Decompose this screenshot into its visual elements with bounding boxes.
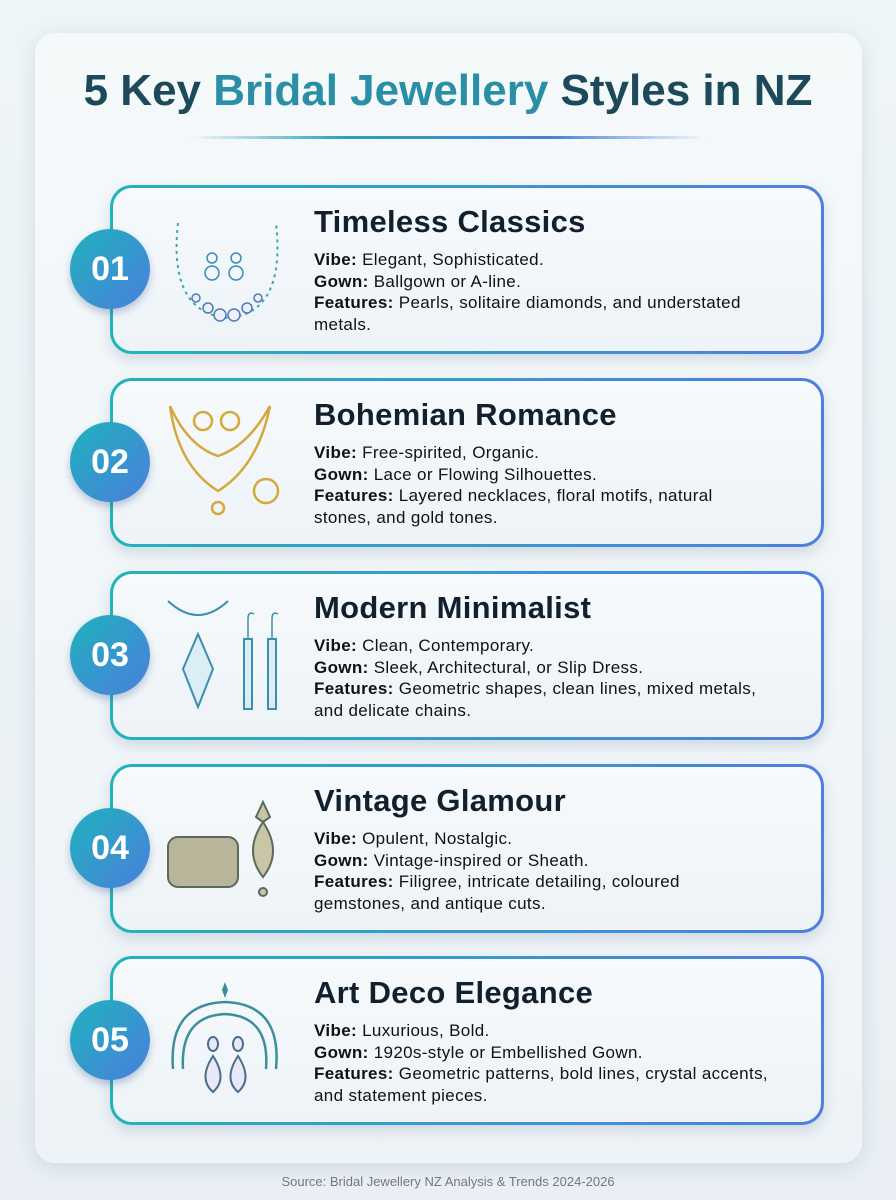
card 04 — [110, 764, 824, 933]
text 03: Gown: Sleek, Architectural, or Slip Dress. — [314, 658, 643, 676]
text 04: Features: Filigree, intricate detailing, coloured — [314, 872, 680, 891]
badge 04 — [70, 808, 150, 888]
text 02 — [314, 397, 713, 526]
text 01: Timeless Classics — [314, 204, 586, 239]
icon: pearl necklace — [176, 222, 278, 322]
text 03: and delicate chains. — [314, 700, 471, 720]
text 01: Gown: Ballgown or A-line. — [314, 272, 521, 290]
text 03 — [314, 590, 756, 720]
text 03: Vibe: Clean, Contemporary. — [314, 636, 534, 655]
text 03: Features: Geometric shapes, clean lines, mixed metals, — [314, 679, 756, 698]
text 05 — [314, 975, 768, 1104]
badge 05: 05 — [91, 1021, 129, 1059]
text 05: Features: Geometric patterns, bold lines, crystal accents, — [314, 1064, 768, 1083]
text 02: stones, and gold tones. — [314, 508, 498, 526]
text 04 — [314, 783, 680, 912]
badge 04: 04 — [91, 829, 129, 867]
badge 01: 01 — [91, 250, 129, 288]
card 02 — [110, 378, 824, 547]
badge 02 — [70, 422, 150, 502]
badge 03: 03 — [91, 636, 129, 674]
text 02: Vibe: Free-spirited, Organic. — [314, 443, 539, 462]
source footer: Source: Bridal Jewellery NZ Analysis & Trends 2024-2026 — [281, 1174, 615, 1189]
text 01 — [314, 204, 741, 334]
icon: gold layered necklace — [168, 405, 280, 516]
text 02: Gown: Lace or Flowing Silhouettes. — [314, 464, 597, 484]
text 01: metals. — [314, 314, 371, 334]
text 01: Vibe: Elegant, Sophisticated. — [314, 250, 544, 269]
text 04: Vibe: Opulent, Nostalgic. — [314, 829, 512, 848]
text 05: and statement pieces. — [314, 1086, 488, 1104]
text 04: Gown: Vintage-inspired or Sheath. — [314, 850, 589, 870]
card 05 — [110, 956, 824, 1125]
badge 02: 02 — [91, 443, 129, 481]
icon: tiara and drop earrings — [171, 982, 278, 1094]
badge 01 — [70, 229, 150, 309]
text 01: Features: Pearls, solitaire diamonds, and understated — [314, 293, 741, 312]
card 01 — [110, 185, 824, 354]
text 04: Vintage Glamour — [314, 783, 566, 818]
title: 5 Key Bridal Jewellery Styles in NZ — [84, 66, 812, 115]
text 05: Gown: 1920s-style or Embellished Gown. — [314, 1042, 643, 1062]
icon: vintage cuff and chandelier earring — [167, 800, 274, 897]
text 02: Bohemian Romance — [314, 397, 617, 432]
text 05: Art Deco Elegance — [314, 975, 593, 1010]
badge 03 — [70, 615, 150, 695]
text 02: Features: Layered necklaces, floral motifs, natural — [314, 486, 713, 505]
text 03: Modern Minimalist — [314, 590, 591, 625]
text 04: gemstones, and antique cuts. — [314, 894, 546, 912]
icon: geometric pendant and earrings — [167, 600, 278, 710]
card 03 — [110, 571, 824, 740]
text 05: Vibe: Luxurious, Bold. — [314, 1021, 490, 1040]
badge 05 — [70, 1000, 150, 1080]
